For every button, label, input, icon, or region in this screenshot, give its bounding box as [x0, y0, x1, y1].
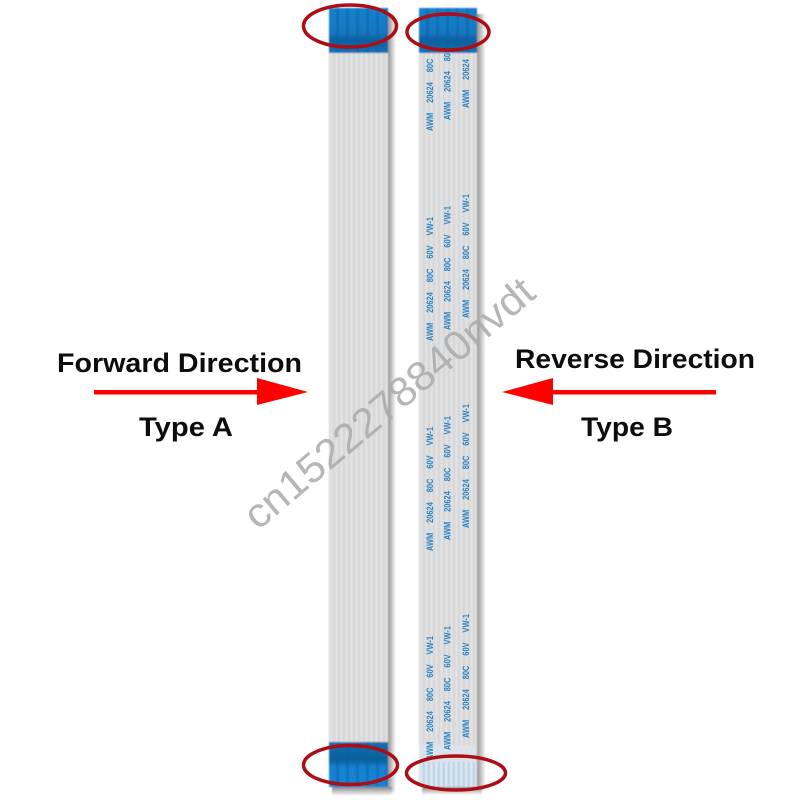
arrow: forward direction	[94, 378, 308, 405]
heading: Forward Direction: Forward Direction	[57, 348, 302, 378]
cable print: repeated AWM 20624 markings: AWM 20624 80C 60V VW-1	[461, 194, 471, 318]
label: Type A: Type A	[139, 412, 233, 442]
panel: Type B reverse direction cable	[419, 8, 486, 795]
cable print: repeated AWM 20624 markings: AWM 20624 80C 60V VW-1	[425, 217, 435, 341]
panel: Type A forward direction cable	[329, 8, 396, 796]
highlight ellipses: cable ends	[304, 5, 506, 790]
cable print: repeated AWM 20624 markings: AWM 20624 80C 60V VW-1	[442, 416, 452, 540]
cable print: repeated AWM 20624 markings: AWM 20624 80C 60V VW-1	[442, 626, 452, 750]
arrow: reverse direction	[502, 378, 716, 405]
cable print: repeated AWM 20624 markings	[426, 53, 469, 758]
cable print: repeated AWM 20624 markings: AWM 20624 80C 60V VW-1	[425, 427, 435, 551]
cable print: repeated AWM 20624 markings: AWM 20624 80C 60V VW-1	[461, 614, 471, 738]
cable print: repeated AWM 20624 markings: AWM 20624 80C 60V VW-1	[461, 404, 471, 528]
heading: Reverse Direction: Reverse Direction	[515, 344, 755, 374]
cable print: repeated AWM 20624 markings: AWM 20624 80C 60V VW-1	[425, 636, 435, 760]
cable print: repeated AWM 20624 markings: AWM 20624 80C 60V VW-1	[442, 206, 452, 330]
watermark: cn1522278840nvdt	[234, 268, 544, 538]
label: Type B: Type B	[581, 412, 673, 442]
